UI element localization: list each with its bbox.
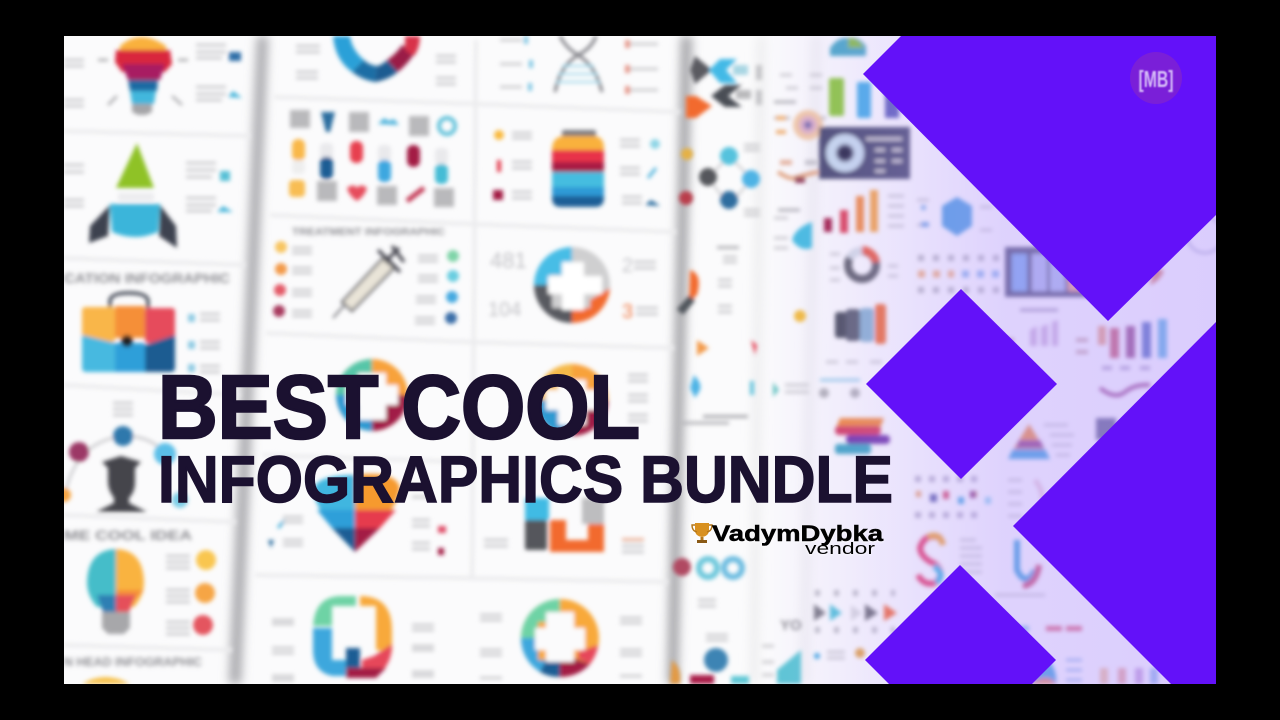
panel dividers: [64, 131, 250, 650]
panel: cross circle: 481: [490, 248, 527, 273]
panel: square cross: [484, 498, 644, 552]
panel: circles row: [673, 382, 809, 606]
panel: rounded cross 1: [272, 596, 434, 680]
panel: network nodes: [679, 145, 760, 215]
panel: stacked blocks: [826, 304, 886, 362]
panel: partly hidden cross circle: [336, 359, 408, 431]
purple shape: bottom diamond: [865, 565, 1056, 684]
panel: light bulb steps: [64, 37, 242, 115]
purple shape: top large: [863, 36, 1216, 321]
heading: education infographic: CATION INFOGRAPHIC: [64, 271, 230, 286]
heading: treatment infographic: TREATMENT INFOGRAPHIC: [292, 227, 445, 238]
panel: rounded cross 2: [480, 599, 642, 678]
vendor badge: [692, 521, 884, 558]
heading: some cool idea: ME COOL IDEA: [64, 527, 192, 543]
panel: cross circle: 2: [622, 255, 633, 277]
panel: table card: [1005, 247, 1090, 297]
panel: lower text: YO: [780, 617, 802, 634]
panel: DNA: [500, 36, 658, 92]
vendor label: vendor: [805, 539, 875, 558]
panel: donut chart: [830, 250, 898, 280]
logo: MB badge: [MB]: [1138, 66, 1174, 92]
panel: briefcase: [82, 293, 220, 372]
panel: chevrons: [686, 56, 762, 118]
title line 2: INFOGRAPHICS BUNDLE: [158, 442, 893, 516]
panel: cross circle: 3: [622, 301, 633, 323]
panel: hexagon cube: [917, 197, 992, 236]
logo: MB badge: [1130, 52, 1182, 104]
panel: dark card donut: [819, 127, 910, 179]
panel: icon grid lower: [915, 479, 1043, 516]
column shadows: [229, 36, 820, 684]
panel: pills icon grid: [289, 110, 455, 207]
panel: cross circle: [488, 247, 658, 323]
title: [158, 358, 893, 516]
panel: heart: [268, 474, 446, 555]
panel: syringe: [273, 241, 459, 324]
icon: trophy: [692, 523, 712, 543]
panel: lower text: [670, 217, 1223, 684]
panel: pyramid: [1008, 418, 1116, 459]
panel: cross circle: 104: [488, 299, 521, 321]
panel: play arrows: [814, 593, 897, 630]
panel: rocket: [64, 143, 233, 248]
panel: radial target: [776, 110, 823, 140]
panel: small pie: [774, 210, 812, 249]
title line 1: BEST COOL: [158, 358, 640, 458]
panel: letter U: [1017, 540, 1039, 586]
panel: half circle: [296, 36, 456, 84]
panel: graduate tree: [57, 403, 188, 512]
panel: teal shapes upper column: [774, 38, 899, 118]
panel: bottle: [493, 130, 660, 207]
panel: bulb quadrants: [87, 549, 216, 635]
panel: small vertical chart: [1000, 310, 1167, 358]
panel: letter S: [918, 536, 982, 584]
small right-column details: [680, 246, 806, 418]
panel: stacked flow: [819, 380, 890, 454]
heading: head infographic: N HEAD INFOGRAPHIC: [64, 657, 202, 669]
purple shape: middle diamond: [866, 289, 1057, 479]
panel: second partly hidden cross circle: [536, 364, 648, 436]
vendor name: VadymDybka: [712, 521, 884, 546]
small bottom head segment: [82, 677, 130, 684]
panel: wave: [778, 160, 818, 180]
panel: icon dots: [915, 253, 1001, 295]
purple wash over collage: [760, 36, 1216, 684]
panel: bar chart: [824, 190, 904, 233]
purple shape: right large: [1013, 322, 1216, 684]
